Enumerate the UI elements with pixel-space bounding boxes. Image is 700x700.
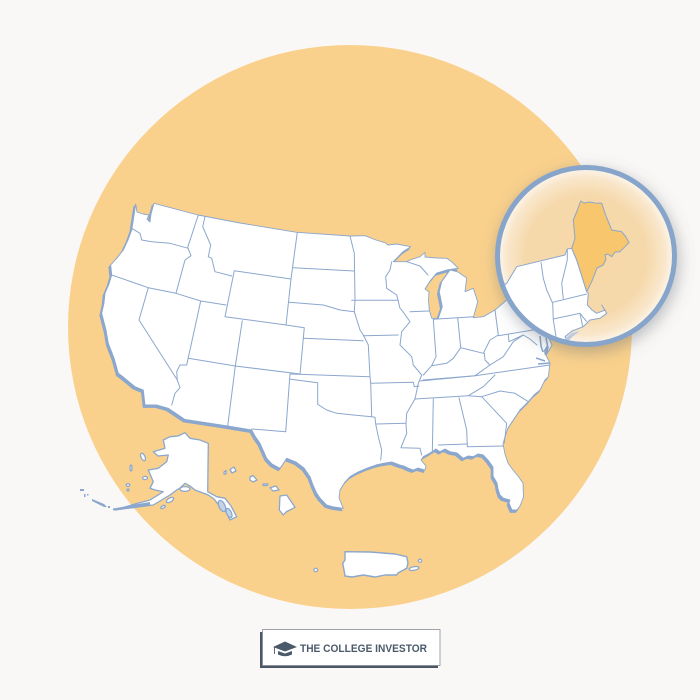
lens background	[497, 167, 675, 345]
New England borders	[541, 249, 587, 337]
New England land	[504, 248, 608, 339]
badge shadow	[260, 632, 438, 668]
Vieques and Culebra	[314, 559, 422, 572]
state borders	[112, 215, 550, 460]
Alaska mainland	[115, 433, 237, 520]
lens ring	[498, 168, 674, 344]
map: Alaska	[80, 433, 237, 520]
map: Hawaii	[224, 467, 295, 515]
Alaska islands	[126, 453, 233, 519]
large orange circle	[68, 45, 632, 609]
map: contiguous United States	[100, 203, 560, 512]
Chesapeake Bay	[536, 336, 550, 364]
icon: graduation cap	[273, 642, 297, 656]
map drop edge	[100, 206, 558, 512]
Puerto Rico main island	[343, 552, 408, 577]
badge box	[262, 630, 440, 666]
logo badge	[260, 630, 440, 668]
Maine highlighted	[572, 201, 629, 292]
Long Island	[564, 331, 580, 340]
inset: New England magnifier	[495, 165, 677, 347]
map: Puerto Rico	[314, 552, 422, 577]
Aleutian Islands	[80, 489, 150, 510]
brand name: THE COLLEGE INVESTOR	[300, 643, 427, 655]
land mass	[102, 203, 560, 510]
inset lens shadow	[497, 170, 679, 352]
